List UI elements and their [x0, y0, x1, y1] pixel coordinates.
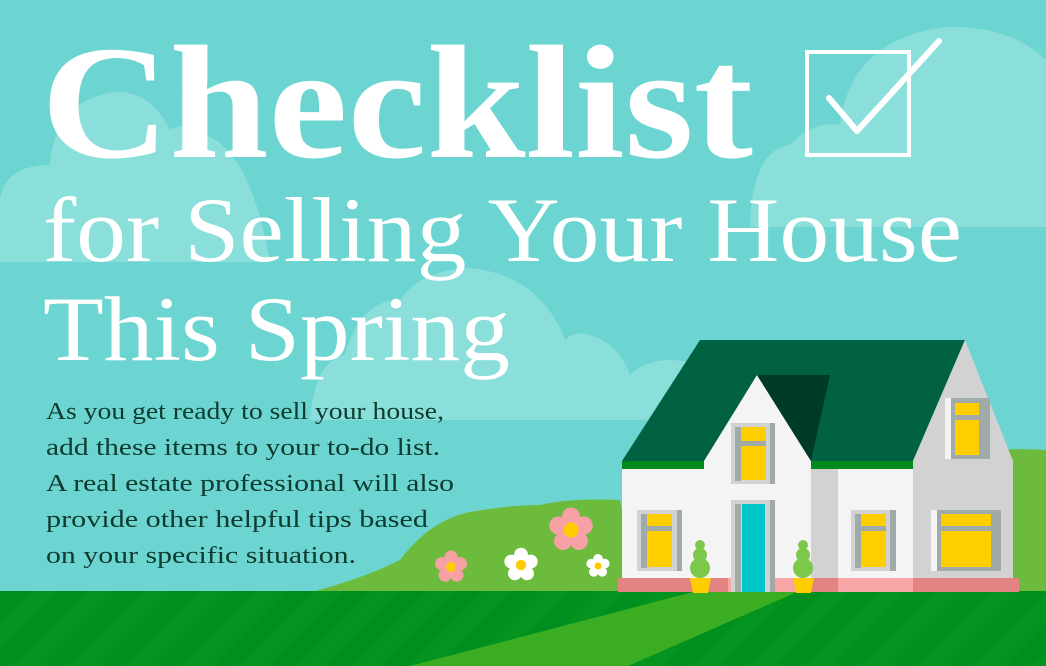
hill: right behind house — [900, 449, 1046, 600]
roof — [622, 340, 965, 461]
cloud: middle — [310, 268, 690, 420]
intro text: on your specific situation. — [46, 543, 356, 569]
flower: small pink — [435, 550, 467, 582]
intro text: A real estate professional will also — [46, 471, 454, 497]
hill: left with flowers — [300, 500, 640, 600]
door — [731, 500, 775, 592]
house — [618, 340, 1019, 593]
title: Checklist: Checklist — [41, 14, 753, 193]
intro text: As you get ready to sell your house, — [46, 399, 444, 425]
right gable — [913, 340, 1013, 461]
cloud: left — [0, 92, 270, 262]
subtitle: for Selling Your House — [43, 179, 962, 281]
cloud: right — [750, 27, 1046, 227]
topiary left — [690, 540, 711, 593]
roof trim — [622, 461, 704, 469]
icon: checkbox — [807, 41, 939, 155]
pink base — [618, 578, 1019, 592]
intro text: provide other helpful tips based — [46, 507, 428, 533]
subtitle: This Spring — [43, 278, 510, 380]
flower: large pink — [549, 508, 593, 550]
flower: small white — [586, 554, 610, 577]
center gable — [704, 375, 811, 480]
intro text: add these items to your to-do list. — [46, 435, 440, 461]
walls — [622, 461, 811, 592]
flower: white — [504, 548, 538, 580]
windows — [637, 398, 1001, 571]
grass lawn — [0, 591, 1046, 666]
subtitle — [43, 179, 962, 380]
intro text — [46, 399, 454, 569]
topiary right — [793, 540, 814, 593]
